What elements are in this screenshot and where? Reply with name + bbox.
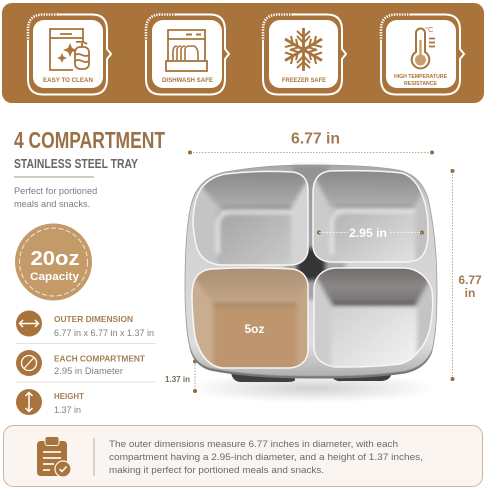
note text: The outer dimensions measure 6.77 inches in diameter, with each [109,439,398,449]
note text: making it perfect for portioned meals and snacks. [109,465,324,475]
icon: dishwasher with soap [50,29,89,70]
compartment: bottom left (gold) [192,268,308,368]
compartment volume label: 5oz [244,322,265,336]
card: high temperature resistance [381,14,464,94]
width dimension label: 6.77 in [291,130,340,148]
compartment: bottom right [314,268,432,366]
compartment diameter label [317,226,424,240]
top banner [2,3,484,103]
spec: height [16,389,85,415]
icon: vertical arrow [16,389,42,415]
note text: compartment having a 2.95-inch diameter, and a height of 1.37 inches, [109,452,423,462]
subtitle: STAINLESS STEEL TRAY [14,157,139,171]
vertical divider [94,438,95,476]
tray photo [180,160,442,403]
title: 4 COMPARTMENT [14,127,165,153]
capacity badge [15,224,92,300]
icon: diameter [16,350,42,376]
bottom note panel [4,426,482,486]
description: meals and snacks. [14,199,90,209]
depth dimension label [165,360,197,393]
spec: outer dimension: OUTER DIMENSION [54,314,133,324]
divider [16,382,156,383]
label: easy to clean: EASY TO CLEAN [43,77,93,84]
divider under subtitle [14,176,94,178]
height dimension label: 6.77 [458,273,482,287]
compartment: top left [194,172,308,264]
spec: height: HEIGHT [54,391,85,401]
spec: outer dimension: 6.77 in x 6.77 in x 1.37 in [54,328,154,338]
card: easy to clean [28,14,111,94]
label: freezer safe: FREEZER SAFE [282,77,327,84]
capacity badge: Capacity [30,271,80,283]
depth dimension label: 1.37 in [165,374,190,384]
card: dishwasher safe [146,14,229,94]
spec: outer dimension [16,310,154,338]
label: dishwash safe: DISHWASH SAFE [162,78,213,84]
compartment: top right [314,171,427,262]
card: high temperature resistance: RESISTANCE [404,81,438,87]
height dimension label [450,169,482,381]
spec: each compartment: EACH COMPARTMENT [54,354,146,364]
label: degree symbol: °C [425,25,434,34]
card: freezer safe [263,14,346,94]
icon: thermometer [412,28,435,68]
compartment diameter label: 2.95 in [349,226,387,240]
compartment highlights [192,171,433,368]
icon: horizontal arrow [16,310,42,336]
height dimension label: in [465,286,475,300]
width dimension label [188,130,434,154]
capacity badge: 20oz [30,248,80,270]
divider [16,343,156,344]
icon: clipboard with check [37,436,71,477]
description: Perfect for portioned [14,186,97,196]
spec: each compartment [16,350,146,376]
label: high temperature resistance: HIGH TEMPERATURE [394,74,448,80]
spec: each compartment: 2.95 in Diameter [54,366,123,376]
spec: height: 1.37 in [54,405,81,415]
icon: snowflake [285,28,322,71]
icon: dishwasher [166,30,207,71]
